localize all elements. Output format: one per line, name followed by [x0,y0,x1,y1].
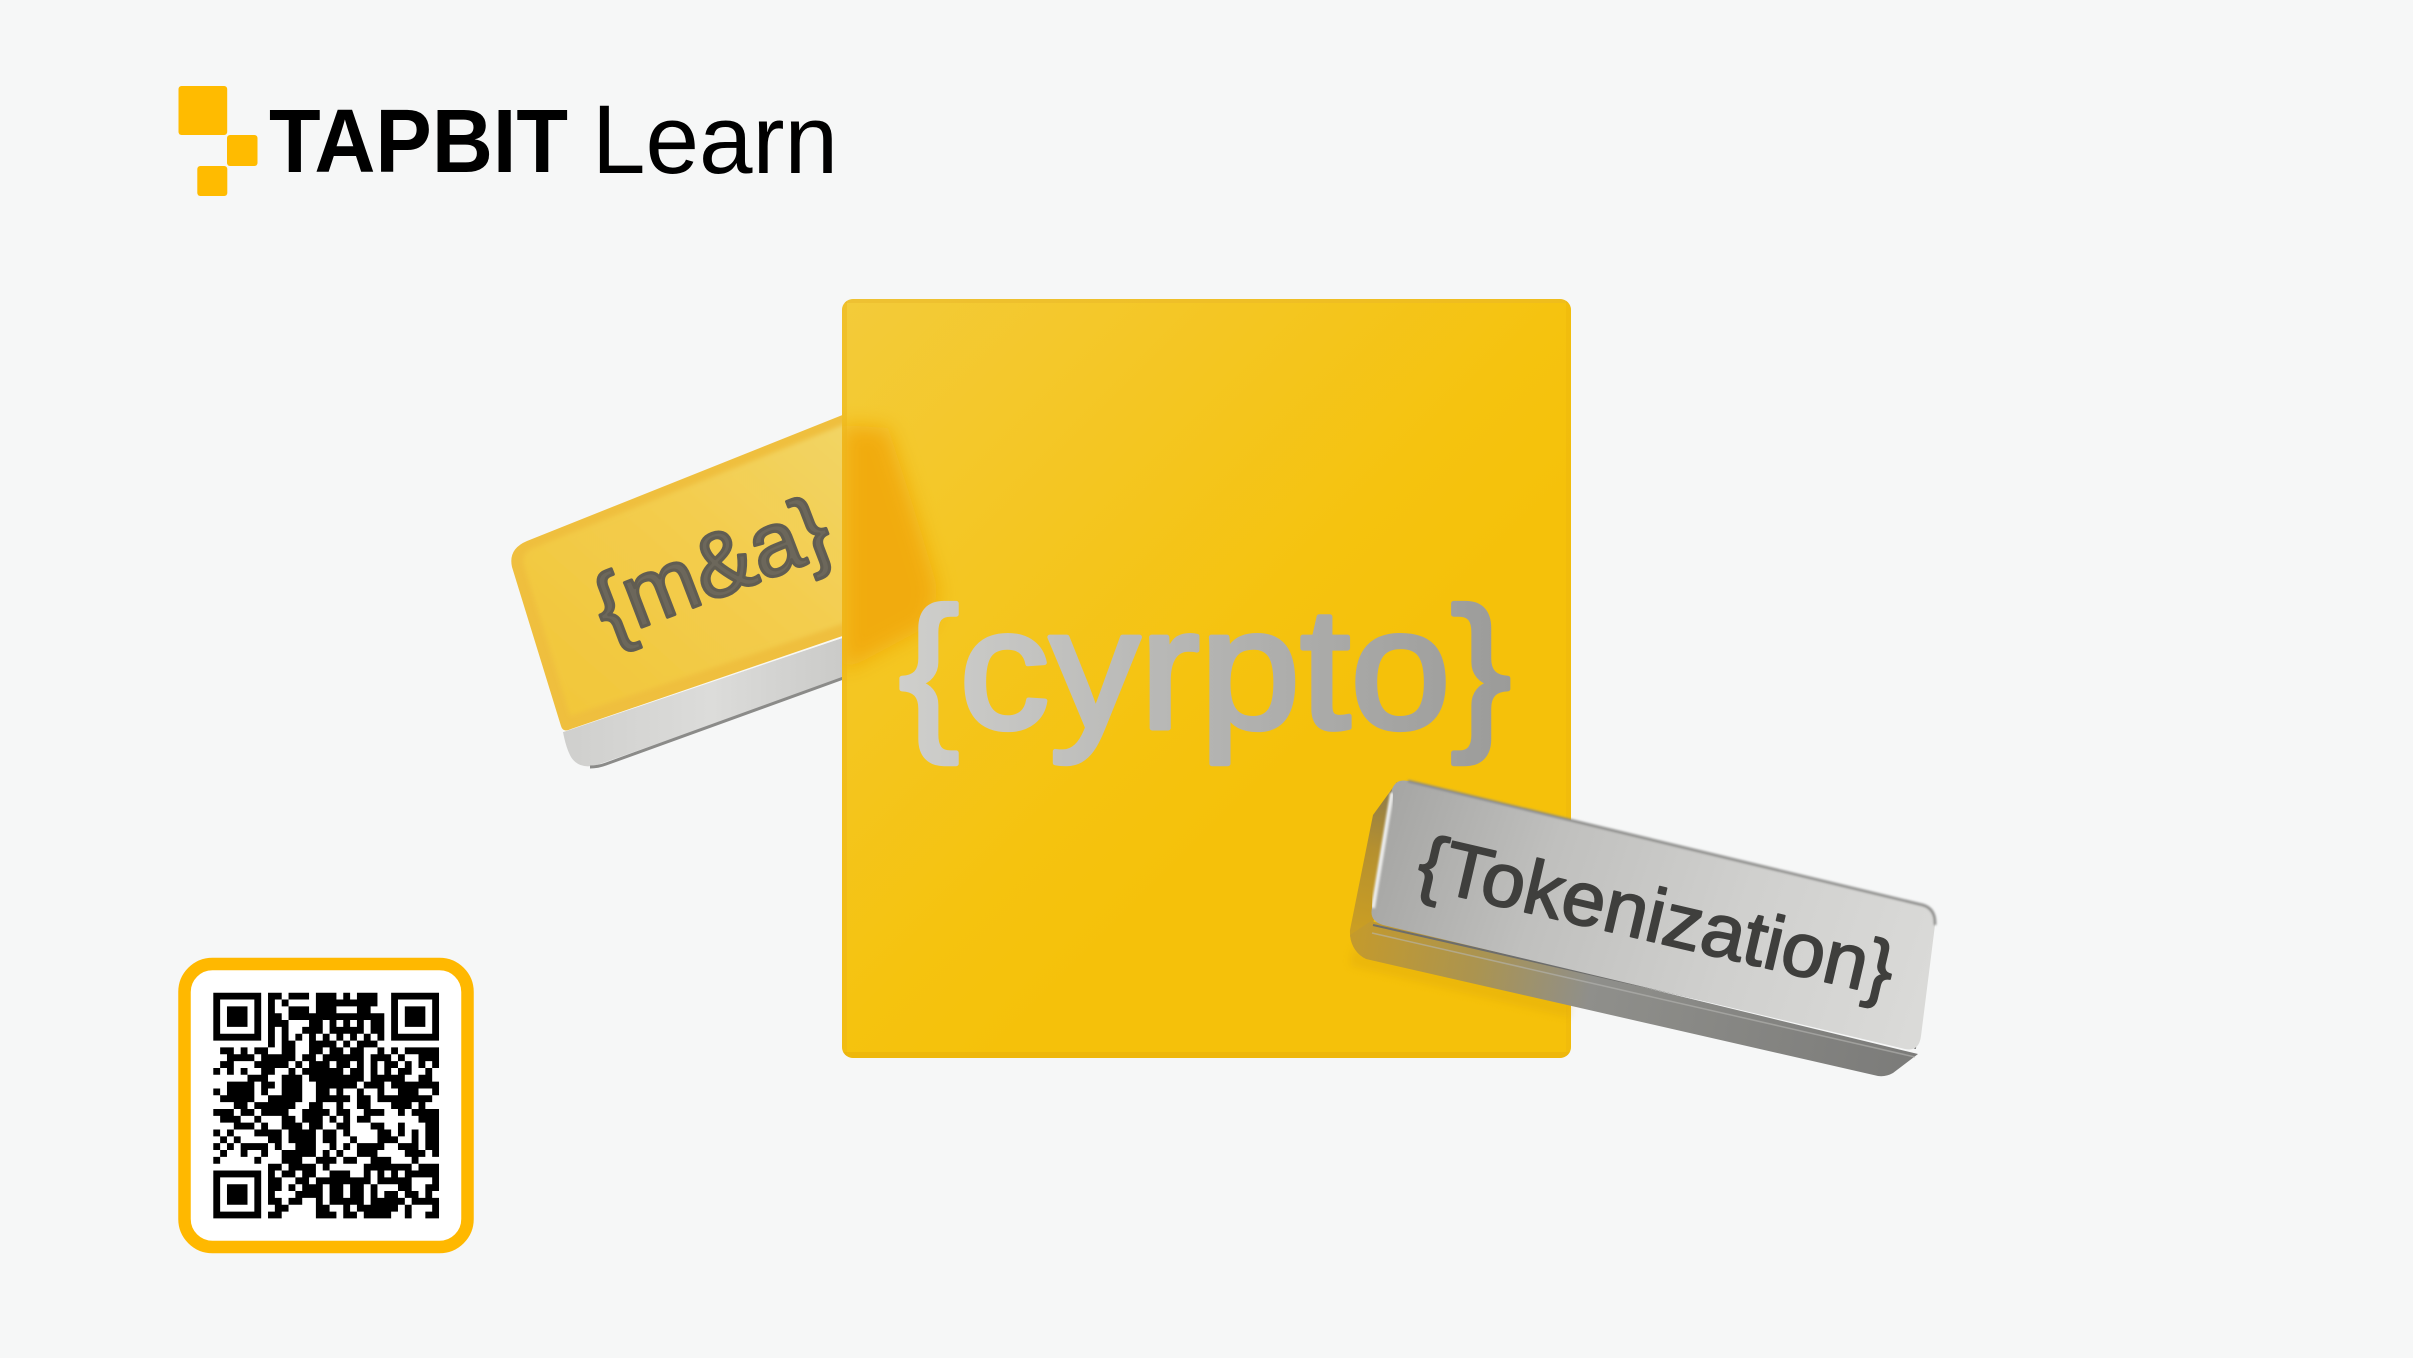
label: {cyrpto}: {cyrpto} [899,573,1511,765]
QR frame [184,964,468,1247]
key: m&a (behind card) [511,408,860,767]
brand suffix: Learn [592,85,838,194]
bottom side [1350,921,1918,1076]
QR code panel [184,964,468,1247]
bevel line [1373,925,1916,1048]
key: Tokenization [1350,780,1935,1076]
main card [842,299,1571,1058]
metal side [563,632,860,766]
yellow face [511,408,860,730]
label: {Tokenization} [1410,820,1903,1013]
card body [842,299,1571,1058]
key shadow on card [1350,948,1570,1018]
metal face [1371,780,1935,1049]
key refraction [842,299,1571,1058]
brand name: TAPBIT [269,92,568,192]
icon: logo squares [178,86,258,196]
QR modules [213,993,439,1218]
logo: TAPBIT Learn [178,85,838,196]
label: {m&a} [579,478,844,659]
left side [1350,782,1397,958]
